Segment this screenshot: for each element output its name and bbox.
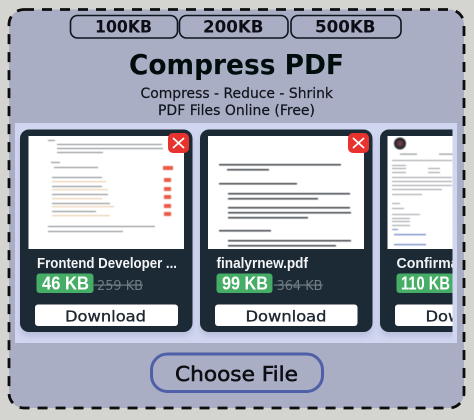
filename: Frontend Developer ... (37, 256, 177, 272)
original size: 259 KB (97, 279, 143, 294)
filename: finalyrnew.pdf (216, 256, 308, 272)
subtitle: Compress - Reduce - Shrink (140, 86, 334, 102)
subtitle: PDF Files Online (Free) (158, 103, 315, 119)
choose file button: Choose File (175, 362, 298, 386)
title: Compress PDF (129, 49, 344, 81)
download button: Download (65, 308, 146, 326)
thumbnail: report page (208, 136, 364, 249)
compressed size badge: 110 KB (401, 274, 450, 294)
card: finalyrnew.pdf (200, 130, 372, 332)
thumbnail: application form (388, 136, 458, 249)
pill: 500KB: 500KB (315, 18, 376, 36)
subtitle (140, 86, 334, 119)
pill: 200KB: 200KB (203, 18, 264, 36)
size pills (70, 16, 401, 38)
original size (94, 280, 143, 290)
pill: 100KB: 100KB (95, 18, 152, 36)
compressed size badge: 99 KB (222, 274, 268, 294)
choose file button (152, 354, 322, 392)
pill: 200KB (180, 16, 288, 38)
thumbnail: document with task list (28, 136, 184, 249)
carousel strip (15, 123, 474, 343)
original size: 364 KB (276, 279, 322, 294)
icon: remove (348, 133, 369, 153)
download button (395, 304, 452, 326)
compressed size badge: 46 KB (42, 274, 89, 294)
pill: 500KB (291, 16, 401, 38)
download button: Download (246, 308, 326, 326)
filename: Confirma (396, 256, 459, 272)
card: Confirmation (clipped) (380, 130, 452, 332)
card: Frontend Developer (20, 130, 192, 332)
download button (215, 304, 358, 326)
pill: 100KB (70, 16, 178, 38)
icon: remove (168, 133, 189, 153)
original size (274, 280, 323, 290)
download button (35, 304, 178, 326)
card shadows (20, 134, 474, 336)
